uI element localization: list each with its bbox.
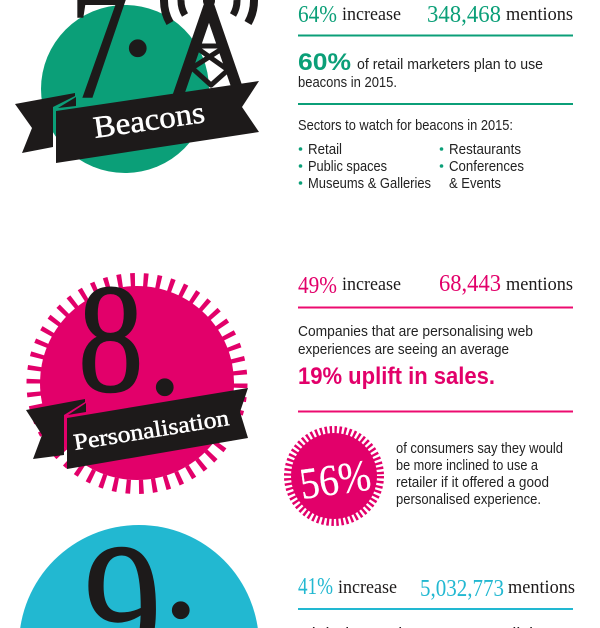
text: companies personalising bbox=[298, 324, 533, 358]
list: sectors bbox=[299, 142, 524, 192]
stat: 49% increase: 49% bbox=[298, 273, 337, 299]
list: sectors: & Events bbox=[449, 176, 501, 192]
green circle bbox=[41, 5, 209, 173]
panel: beacons badge bbox=[15, 0, 259, 173]
list: sectors: Retail bbox=[308, 142, 342, 158]
stat: 68,443 mentions: 68,443 bbox=[439, 271, 501, 297]
text: consumers inclined: personalised experience. bbox=[396, 492, 541, 508]
text: sectors heading: Sectors to watch for beacons in 2015: bbox=[298, 118, 513, 134]
stat: 41% increase: increase bbox=[338, 578, 397, 598]
panel: beacons stats bbox=[298, 2, 573, 192]
text: 60% of retail marketers: of retail marketers plan to use bbox=[357, 57, 543, 73]
stat: 5,032,773 mentions bbox=[420, 576, 575, 602]
list: sectors: Public spaces bbox=[308, 159, 387, 175]
numeral 9 bbox=[84, 484, 200, 628]
stat: 68,443 mentions bbox=[439, 271, 573, 297]
ribbon: Beacons: Beacons bbox=[91, 94, 207, 145]
text: 60% of retail marketers: 60% bbox=[298, 49, 351, 76]
stat: 348,468 mentions: 348,468 bbox=[427, 2, 501, 28]
panel: third topic stats bbox=[298, 574, 575, 628]
stat: 49% increase bbox=[298, 273, 401, 299]
list: sectors: Museums & Galleries bbox=[308, 176, 431, 192]
stat: 49% increase: increase bbox=[342, 275, 401, 295]
callout: 56% burst: 56% bbox=[297, 450, 374, 509]
panel: personalisation badge bbox=[26, 253, 248, 487]
cyan circle bbox=[19, 525, 259, 628]
ribbon: Personalisation: Personalisation bbox=[72, 405, 231, 455]
list: sectors: Restaurants bbox=[449, 142, 521, 158]
numeral 8: 8 bbox=[78, 253, 144, 426]
stat: 348,468 mentions: mentions bbox=[506, 5, 573, 25]
panel: personalisation stats bbox=[288, 271, 573, 522]
stat: 64% increase bbox=[298, 2, 401, 28]
text: companies personalising: experiences are seeing an average bbox=[298, 342, 509, 358]
stat: 68,443 mentions: mentions bbox=[506, 275, 573, 295]
text: consumers inclined: be more inclined to use a bbox=[396, 458, 539, 474]
text: consumers inclined: of consumers say they would bbox=[396, 441, 563, 457]
ribbon: Beacons bbox=[15, 81, 259, 163]
stat: 348,468 mentions bbox=[427, 2, 573, 28]
text: companies personalising: Companies that are personalising web bbox=[298, 324, 533, 340]
ribbon: Personalisation bbox=[26, 388, 248, 469]
pink sunburst circle bbox=[34, 280, 240, 487]
callout: 19% uplift in sales: 19% uplift in sales. bbox=[298, 363, 495, 390]
numeral 8 bbox=[78, 253, 184, 427]
text: 60% of retail marketers: beacons in 2015. bbox=[298, 75, 397, 91]
stat: 5,032,773 mentions: 5,032,773 bbox=[420, 576, 504, 602]
text: consumers inclined: retailer if it offered a good bbox=[396, 475, 549, 491]
callout: 56% burst bbox=[288, 430, 380, 522]
numeral 7 bbox=[71, 0, 156, 132]
text: consumers inclined bbox=[396, 441, 563, 508]
icon: radio tower bbox=[164, 0, 254, 96]
stat: 41% increase bbox=[298, 574, 397, 600]
stat: 5,032,773 mentions: mentions bbox=[508, 578, 575, 598]
stat: 41% increase: 41% bbox=[298, 574, 333, 600]
numeral 8: . bbox=[146, 261, 184, 427]
list: sectors: Conferences bbox=[449, 159, 524, 175]
stat: 64% increase: 64% bbox=[298, 2, 337, 28]
panel: third topic badge bbox=[19, 484, 259, 628]
text: 60% of retail marketers bbox=[298, 49, 543, 91]
stat: 64% increase: increase bbox=[342, 5, 401, 25]
